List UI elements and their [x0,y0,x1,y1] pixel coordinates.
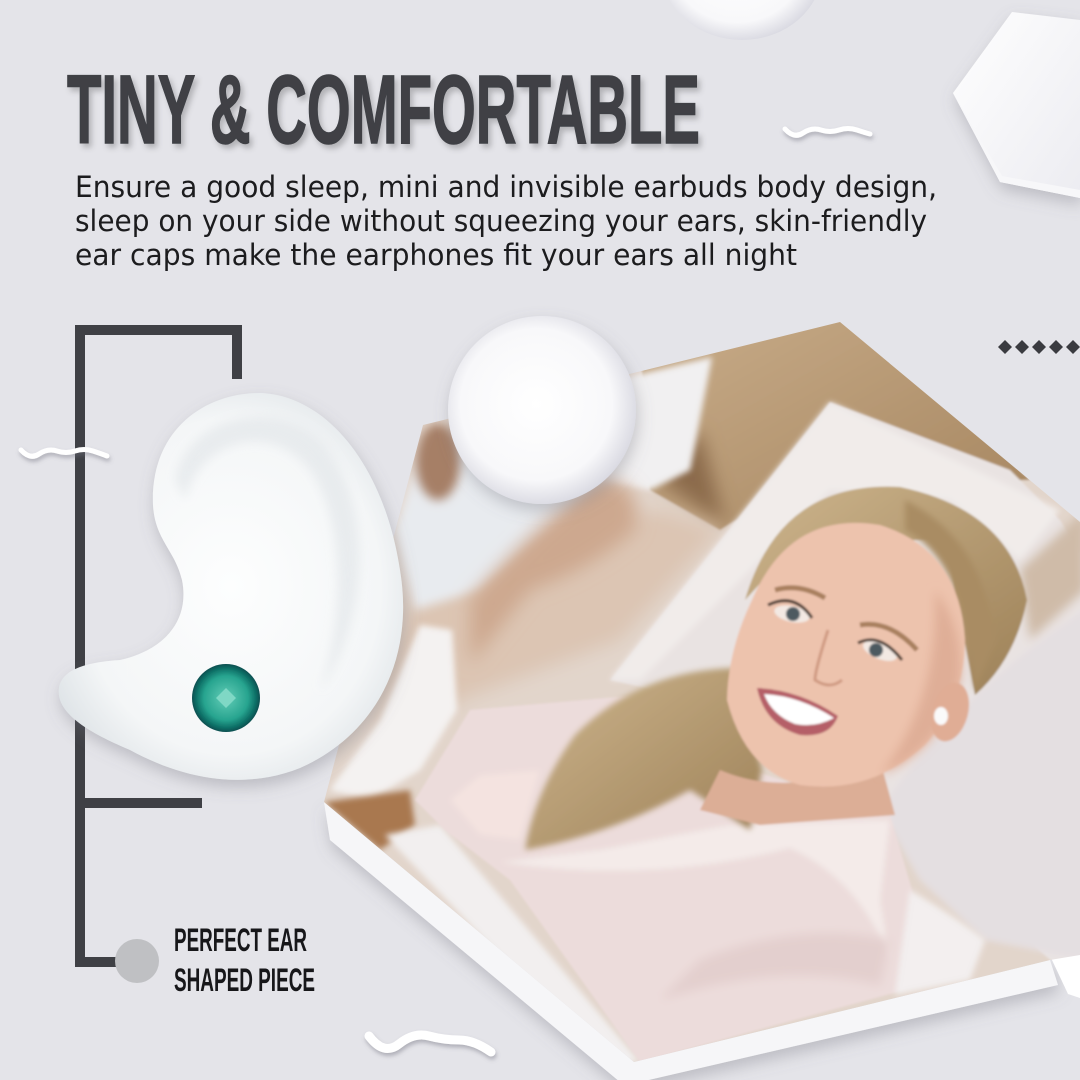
diamond row [998,340,1080,354]
right pillow shade [894,827,1038,952]
background pillow [590,357,712,490]
squiggle: bottom [369,1035,491,1052]
ear with earbud [934,683,970,742]
background person arm [470,480,637,665]
callout dot [115,939,159,983]
background head [416,424,460,500]
neck [700,770,896,826]
photo: woman smiling in bed [300,300,1080,1080]
callout label: PERFECT EAR [174,922,307,958]
nose [815,630,842,685]
gown [415,695,915,1062]
decorative sphere: top [662,0,822,40]
decorative hexagon: top right [953,12,1080,198]
sheet lower [385,825,640,1062]
earbud product [59,393,403,780]
squiggle: left [21,450,107,456]
tan strip right [1020,510,1080,640]
hair over temple [904,501,976,688]
squiggle: top [785,128,870,135]
decorative sphere: centre [448,316,636,504]
background bedding [381,507,722,708]
bed wood left [324,790,415,850]
description text: ear caps make the earphones fit your ears all night [75,238,797,272]
hair [745,487,1027,695]
description text [75,170,937,272]
foreground sheet left [330,625,457,800]
lace sleeve [895,890,985,995]
mouth [757,688,838,735]
earbud teal button [192,664,260,732]
description text: Ensure a good sleep, mini and invisible earbuds body design, [75,170,937,204]
main pillow [610,402,1080,990]
callout bracket [80,330,237,962]
callout label: SHAPED PIECE [174,962,315,998]
earbud highlight [175,417,359,690]
callout label [174,922,315,998]
eyes [774,604,811,624]
background person shirt [394,452,590,614]
photo frame: white hexagon edge [324,802,1080,1080]
description text: sleep on your side without squeezing your ears, skin-friendly [75,204,927,238]
face [727,523,965,787]
wall headboard [640,310,1030,530]
